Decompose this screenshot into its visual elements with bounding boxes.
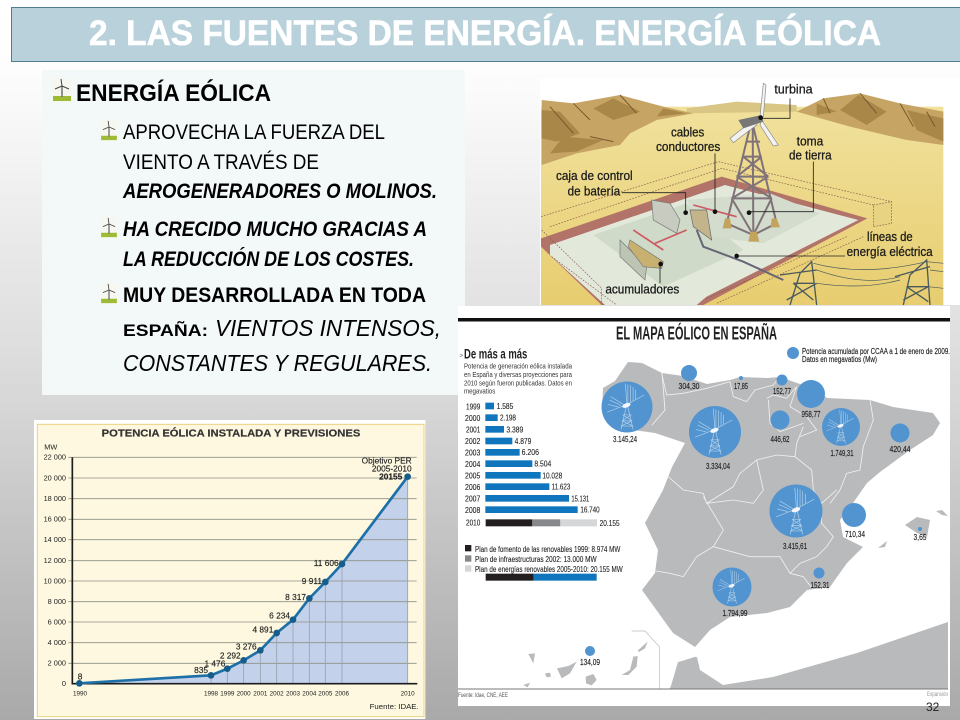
map value labels: 3.415,61 (783, 541, 807, 551)
bar chart: de más a más: 2003 (465, 448, 481, 458)
map value labels: 3.145,24 (613, 434, 637, 444)
line chart: potencia eólica instalada: 2000 (237, 691, 251, 698)
data labels: 8 (78, 671, 83, 681)
map sources: Fuente: Idae, CNE, AEE (458, 692, 508, 699)
line chart: potencia eólica instalada: 2003 (286, 691, 301, 698)
data labels: 11 606 (314, 558, 339, 568)
data labels: 2005-2010 (372, 464, 412, 474)
bullet: desarrollo en España: MUY DESARROLLADA EN TODA (123, 284, 426, 307)
title (12, 8, 960, 62)
map value labels: 3,65 (914, 532, 927, 542)
axis labels: 8 000 (48, 597, 66, 606)
illustration labels: energía eléctrica (847, 244, 933, 259)
illustration labels: turbina (774, 81, 813, 96)
data labels: 20155 (379, 471, 403, 481)
bar chart: de más a más: 2010 según fueron publicadas. Datos en (464, 378, 572, 387)
data labels: 4 891 (252, 625, 274, 635)
grid lines (68, 457, 417, 684)
bar chart: de más a más: 2002 (465, 436, 481, 446)
line chart: potencia eólica instalada (34, 420, 425, 719)
bullet: aerogeneradores: AEROGENERADORES O MOLINOS. (122, 180, 437, 203)
bar chart: de más a más: 2008 (465, 505, 481, 515)
map value labels: 17,85 (734, 381, 748, 391)
bar chart legend: Plan de energías renovables 2005-2010: 20.155 MW (475, 564, 623, 574)
illustration labels: caja de control (556, 168, 633, 183)
bullet: desarrollo en España: VIENTOS INTENSOS, (215, 315, 441, 341)
axis labels: 14 000 (44, 535, 66, 544)
bar chart: de más a más: 2004 (465, 459, 481, 469)
line chart: potencia eólica instalada: 1990 (73, 691, 88, 698)
map value labels: 134,09 (580, 657, 600, 667)
data labels (78, 456, 412, 681)
bar chart: de más a más: 3.389 (506, 424, 524, 434)
data labels: 835 (194, 665, 208, 675)
bar chart legend: Plan de fomento de las renovables 1999: 8.974 MW (475, 544, 620, 554)
data labels: 2 292 (220, 650, 241, 660)
bar chart: de más a más (459, 346, 623, 581)
bubbles: installed power by region (585, 347, 922, 656)
bar chart: de más a más: 6.206 (522, 447, 539, 457)
pylons (780, 260, 943, 305)
bullet: reducción de costes (100, 217, 427, 271)
axis labels: 6 000 (48, 617, 66, 626)
turbine blades (730, 83, 778, 146)
illustration labels (556, 81, 933, 296)
illustration labels: líneas de (867, 229, 913, 244)
bar chart: de más a más: De más a más (464, 346, 528, 361)
data labels: 9 911 (302, 576, 322, 586)
map value labels: 420,44 (890, 444, 911, 454)
illustration labels: conductores (656, 139, 721, 154)
line chart: potencia eólica instalada: 1999 (220, 691, 235, 698)
page number: 32 (926, 700, 940, 714)
bullet: desarrollo en España: CONSTANTES Y REGULARES. (123, 350, 432, 376)
panel: text block (42, 70, 465, 395)
map value labels: 1.749,31 (830, 448, 854, 458)
data labels: 1 476 (204, 659, 226, 669)
map value labels: 152,77 (773, 386, 791, 396)
map legend (802, 347, 950, 364)
data labels: 6 234 (269, 610, 290, 620)
map value labels: 3.334,04 (706, 461, 730, 471)
illustration labels: cables (671, 125, 705, 140)
bar chart: de más a más: 11.623 (552, 482, 571, 492)
map value labels: 152,31 (810, 580, 830, 590)
bar chart: de más a más: 2000 (465, 413, 481, 423)
map title: EL MAPA EÓLICO EN ESPAÑA (616, 322, 777, 344)
dashed cable trenches (541, 162, 892, 305)
bar chart: de más a más: 20.155 (600, 518, 620, 528)
axis labels: 10 000 (44, 576, 66, 585)
area fill (79, 477, 408, 684)
map sources: Expansión (927, 691, 948, 698)
axis labels: 22 000 (44, 453, 66, 462)
equipment (652, 200, 680, 233)
bar chart: de más a más: 2010 (466, 517, 481, 527)
bullet: reducción de costes: HA CRECIDO MUCHO GRACIAS A (123, 218, 427, 241)
axis labels: MW (44, 443, 57, 452)
hills (542, 93, 943, 165)
map value labels: 1.794,99 (722, 608, 748, 618)
line chart: potencia eólica instalada: 2005 (318, 691, 333, 698)
line chart: potencia eólica instalada: POTENCIA EÓLICA INSTALADA Y PREVISIONES (102, 426, 360, 439)
map legend: Datos en megavatios (Mw) (802, 355, 877, 364)
bar chart: de más a más: 4.879 (515, 436, 532, 446)
bullet: aerogeneradores: APROVECHA LA FUERZA DEL (123, 121, 385, 144)
bar chart: de más a más: en España y diversas proyecciones para (464, 370, 573, 379)
map value labels: 304,30 (678, 381, 700, 391)
callout leaders (622, 98, 845, 283)
axis labels: 4 000 (48, 638, 66, 647)
bar chart: de más a más: 8.504 (534, 459, 552, 469)
bar chart legend (465, 544, 623, 581)
panel: wind map of Spain (458, 306, 950, 706)
axis labels: 12 000 (44, 556, 66, 565)
illustration labels: de batería (568, 183, 621, 198)
line chart: potencia eólica instalada: 2006 (335, 691, 350, 698)
map: Canary Islands inset (523, 631, 703, 689)
axis labels: 0 (62, 679, 66, 688)
illustration: wind turbine installation (540, 78, 960, 305)
bar chart: de más a más: > (459, 352, 463, 359)
bar chart: de más a más: megavatios (464, 386, 495, 395)
bar chart: de más a más: 2007 (465, 494, 481, 504)
data labels: Objetivo PER (362, 456, 412, 466)
tower (727, 120, 777, 235)
chart source: Fuente: IDAE. (370, 702, 419, 711)
axis labels: 16 000 (44, 515, 66, 524)
line chart: potencia eólica instalada: 2001 (253, 691, 268, 698)
bullet: reducción de costes: LA REDUCCIÓN DE LOS COSTES. (123, 247, 414, 271)
map value labels: 958,77 (802, 409, 821, 419)
data labels: 3 276 (236, 641, 257, 651)
platform (541, 177, 867, 305)
bullet: aerogeneradores: VIENTO A TRAVÉS DE (123, 151, 319, 174)
heading: energía eólica: ENERGÍA EÓLICA (76, 79, 271, 107)
axis labels: 18 000 (44, 494, 66, 503)
bullet: aerogeneradores (100, 120, 437, 203)
illustration labels: de tierra (789, 147, 832, 162)
title: 2. LAS FUENTES DE ENERGÍA. ENERGÍA EÓLICA (89, 13, 881, 53)
line chart: potencia eólica instalada: 1998 (204, 691, 219, 698)
map sources (458, 691, 948, 699)
map value labels: 710,34 (845, 529, 865, 539)
bar chart: de más a más: 2006 (465, 482, 481, 492)
bar chart: de más a más: 15.131 (571, 493, 590, 503)
icon: turbine bullet (52, 78, 72, 102)
line chart: potencia eólica instalada: 2002 (270, 691, 284, 698)
bullet: desarrollo en España (100, 283, 441, 376)
axis labels (44, 443, 66, 688)
axis labels: 20 000 (44, 473, 66, 482)
line chart: potencia eólica instalada: 2010 (401, 691, 415, 698)
data labels: 8 317 (285, 592, 306, 602)
bar chart: de más a más: 2.198 (500, 413, 516, 423)
map value labels: 446,62 (770, 434, 790, 444)
bar chart: de más a más: 16.740 (580, 505, 600, 515)
bar chart: de más a más: 1999 (466, 401, 481, 411)
illustration labels: acumuladores (605, 281, 680, 296)
bar chart legend: Plan de infraestructuras 2002: 13.000 MW (475, 554, 597, 564)
line chart: potencia eólica instalada: 2004 (302, 691, 317, 698)
map value labels (580, 381, 927, 667)
bar chart: de más a más: 2001 (466, 424, 481, 434)
map: Spain regions (602, 362, 948, 689)
bullet: desarrollo en España: ESPAÑA: (123, 320, 208, 340)
bar chart: de más a más: Potencia de generación eólica instalada (464, 362, 573, 371)
bar chart: de más a más: 10.028 (542, 470, 563, 480)
illustration labels: toma (797, 133, 824, 148)
axis labels: 2 000 (48, 659, 66, 668)
bar chart: de más a más: 1.585 (497, 401, 514, 411)
bar chart: de más a más: 2005 (465, 471, 481, 481)
data line (79, 477, 408, 683)
